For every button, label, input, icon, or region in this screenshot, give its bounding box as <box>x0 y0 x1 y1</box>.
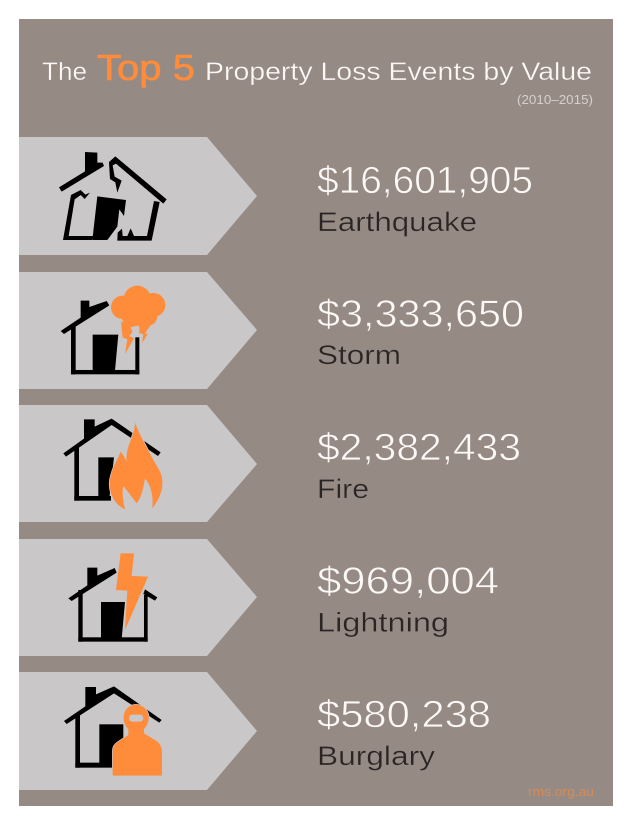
icon: house with lightning bolt <box>68 553 157 642</box>
arrow banner: burglary <box>19 672 257 790</box>
title: Top 5 <box>97 47 195 88</box>
label: burglary: Burglary <box>317 741 436 771</box>
value: fire: $2,382,433 <box>317 427 521 469</box>
panel: burglary row <box>19 672 491 790</box>
title: Property Loss Events by Value <box>205 58 592 86</box>
title <box>42 47 592 88</box>
arrow banner: lightning <box>19 539 257 656</box>
arrow banner: fire <box>19 405 257 522</box>
icon: earthquake-damaged house <box>59 152 167 241</box>
source link: rms.org.au <box>528 784 594 799</box>
label: fire: Fire <box>317 474 369 504</box>
arrow banner: storm <box>19 272 257 389</box>
label: earthquake: Earthquake <box>317 207 477 237</box>
value: earthquake: $16,601,905 <box>317 160 533 202</box>
panel: fire row <box>19 405 521 522</box>
panel: storm row <box>19 272 524 389</box>
title: The <box>42 58 87 86</box>
label: lightning: Lightning <box>317 608 449 638</box>
value: lightning: $969,004 <box>317 560 499 602</box>
icon: house with flame <box>63 419 162 509</box>
value: storm: $3,333,650 <box>317 294 524 336</box>
icon: house with masked burglar <box>64 686 162 776</box>
label: storm: Storm <box>317 340 401 370</box>
panel: earthquake row <box>19 137 533 255</box>
arrow banner: earthquake <box>19 137 257 255</box>
value: burglary: $580,238 <box>317 694 491 736</box>
subtitle: date range: (2010–2015) <box>517 93 593 107</box>
icon: house with storm cloud <box>61 286 165 374</box>
panel: lightning row <box>19 539 499 656</box>
